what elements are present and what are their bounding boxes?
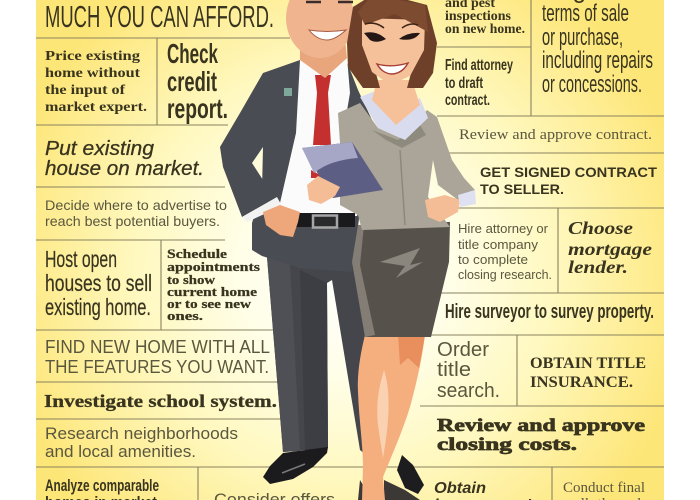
lapel pin — [284, 88, 292, 96]
text: order title search: title — [437, 359, 471, 381]
text: check credit report: report. — [167, 93, 228, 124]
text: order title search: search. — [437, 380, 500, 402]
text: check credit report: credit — [167, 66, 217, 97]
text: find attorney: contract. — [445, 92, 490, 109]
text: get signed contract: GET SIGNED CONTRACT — [480, 164, 657, 180]
tie — [313, 75, 331, 145]
text: find attorney: to draft — [445, 75, 483, 92]
woman figure — [302, 0, 476, 500]
text: price existing home — [45, 49, 147, 115]
text: schedule appointments: Schedule — [167, 247, 228, 261]
blouse collar — [360, 90, 428, 140]
text: check credit report — [167, 38, 228, 124]
text: research neighborhoods — [45, 424, 238, 461]
man's face — [286, 0, 354, 58]
text: choose mortgage lender — [568, 218, 652, 277]
text: pest inspections: inspections — [445, 8, 511, 23]
text: host open houses: existing home. — [45, 294, 151, 320]
neck — [372, 80, 420, 125]
right column checklist — [434, 0, 657, 500]
woman's hand on tablet — [307, 176, 340, 204]
woman's face — [362, 18, 425, 85]
text: find new home: FIND NEW HOME WITH ALL — [45, 337, 270, 357]
text: hire attorney: Hire attorney or — [458, 221, 549, 236]
text: find attorney: Find attorney — [445, 57, 513, 74]
text: pest inspections — [445, 0, 525, 36]
text: terms of sale: terms of sale — [542, 0, 629, 27]
tablet — [302, 142, 383, 198]
text: obtain homeowner's insurance — [434, 480, 540, 500]
heels — [358, 480, 420, 500]
shirt cuff — [242, 197, 282, 222]
text: choose mortgage lender: Choose — [568, 218, 633, 238]
woman's eyebrows — [365, 23, 418, 28]
text: terms of sale — [542, 0, 653, 98]
heading: much you can afford: MUCH YOU CAN AFFORD. — [45, 0, 274, 34]
jacket — [220, 57, 372, 272]
text: obtain title insurance — [530, 355, 646, 391]
woman's fringe — [358, 0, 428, 32]
text: price existing home: the input of — [45, 83, 125, 98]
man figure — [220, 0, 424, 494]
legs — [358, 335, 425, 500]
text: choose mortgage lender: mortgage — [568, 239, 652, 259]
text: choose mortgage lender: lender. — [568, 257, 628, 277]
text: review and approve closing costs: Review and approve — [437, 415, 645, 435]
illustration: real estate agents — [220, 0, 476, 500]
text: analyze comparable — [45, 476, 159, 500]
text: schedule appointments: appointments — [167, 260, 260, 274]
text: pest inspections: on new home. — [445, 21, 525, 36]
text: hire attorney: closing research. — [458, 267, 552, 282]
woman's eyes — [364, 32, 420, 42]
text: decide where to advertise: Decide where to advertise to — [45, 197, 227, 213]
text: put existing house on market: house on market. — [45, 158, 204, 180]
shirt — [277, 57, 363, 216]
text: decide where to advertise: reach best potential buyers. — [45, 213, 220, 229]
text: price existing home: Price existing — [45, 49, 140, 64]
text: get signed contract: TO SELLER. — [480, 181, 564, 197]
text: obtain title insurance: INSURANCE. — [530, 374, 633, 391]
text: host open houses — [45, 246, 152, 320]
text: review and approve contract: Review and approve contract. — [459, 127, 652, 143]
text: investigate school system: Investigate school system. — [44, 391, 277, 411]
text: schedule appointments: or to see new — [167, 297, 251, 311]
text: terms of sale: or purchase, — [542, 24, 623, 51]
text: check credit report: Check — [167, 38, 218, 69]
jacket — [338, 103, 475, 230]
skirt — [352, 222, 450, 337]
text: obtain title insurance: OBTAIN TITLE — [530, 355, 646, 372]
text: obtain homeowner's insurance: Obtain — [434, 480, 486, 497]
text: research neighborhoods: Research neighborhoods — [45, 424, 238, 443]
text: hire attorney: to complete — [458, 252, 528, 267]
text: put existing house on market — [45, 138, 204, 180]
neck — [300, 40, 347, 78]
text: host open houses: Host open — [45, 246, 117, 272]
text: order title search — [437, 339, 500, 402]
text: schedule appointments: to show — [167, 273, 215, 287]
text: order title search: Order — [437, 339, 489, 361]
text: analyze comparable: Analyze comparable — [45, 476, 159, 495]
text: hire attorney — [458, 221, 552, 282]
text: conduct final walk-through: Conduct final — [563, 480, 645, 496]
woman's smile — [377, 63, 408, 74]
text: research neighborhoods: and local amenities. — [45, 442, 196, 461]
text: decide where to advertise — [45, 197, 227, 229]
trousers — [262, 245, 385, 455]
text: find new home: THE FEATURES YOU WANT. — [45, 357, 269, 377]
text: put existing house on market: Put existing — [45, 138, 154, 160]
text: price existing home: home without — [45, 66, 140, 81]
man's smile — [309, 30, 346, 40]
text: hire attorney: title company — [458, 237, 539, 252]
man's eyes — [306, 1, 353, 3]
text: get signed contract — [480, 164, 657, 197]
text: review and approve closing costs: closing costs. — [437, 434, 577, 454]
woman's hand on hip — [425, 195, 460, 222]
right shoe — [397, 455, 424, 494]
text: find attorney — [445, 57, 513, 109]
hair — [347, 0, 437, 88]
text: find new home — [45, 337, 270, 377]
text: price existing home: market expert. — [45, 100, 147, 115]
blouse cuff — [458, 190, 476, 207]
text: schedule appointments: ones. — [167, 309, 203, 323]
man's hand — [263, 205, 300, 237]
left shoe — [263, 447, 328, 484]
text: host open houses: houses to sell — [45, 270, 152, 296]
text: schedule appointments: current home — [167, 285, 258, 299]
belt — [283, 213, 355, 227]
left column checklist — [44, 0, 335, 500]
text: review and approve closing costs — [437, 415, 645, 454]
text: schedule appointments — [167, 247, 260, 323]
